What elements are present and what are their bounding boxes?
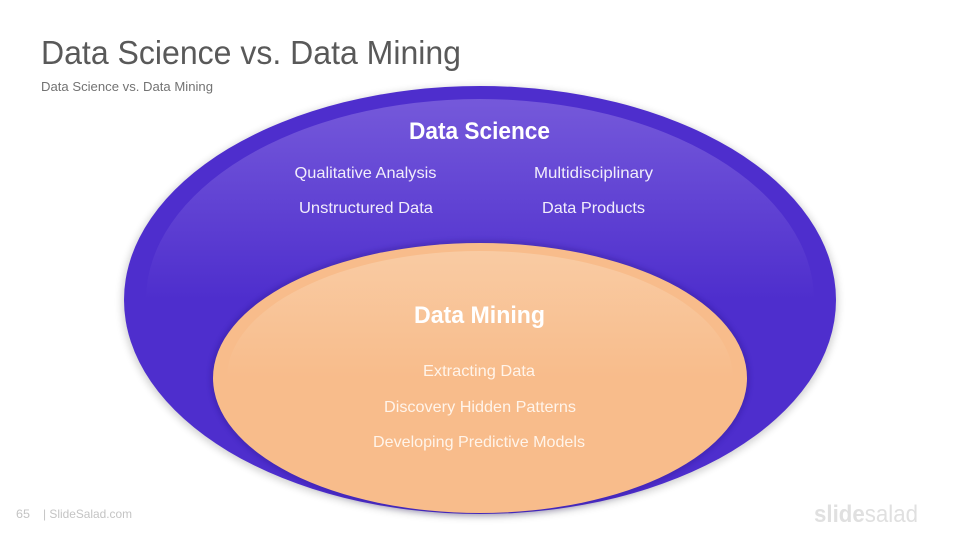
panel: data mining ellipse <box>211 241 749 515</box>
page number: 65 <box>16 507 30 521</box>
subtitle: Data Science vs. Data Mining <box>41 80 213 94</box>
data science items: Unstructured Data <box>299 200 433 217</box>
data mining items <box>373 363 585 451</box>
data science items: Multidisciplinary <box>534 165 653 182</box>
logo wordmark: slidesalad <box>814 501 918 528</box>
data mining items: Discovery Hidden Patterns <box>384 399 576 416</box>
heading: data science: Data Science <box>409 118 550 145</box>
data mining items: Developing Predictive Models <box>373 434 585 451</box>
data science items <box>294 165 653 217</box>
title: Data Science vs. Data Mining <box>41 34 461 71</box>
footer source: | SlideSalad.com <box>43 507 132 521</box>
heading: data mining: Data Mining <box>414 302 545 329</box>
data mining items: Extracting Data <box>423 363 535 380</box>
panel: data science ellipse <box>122 86 838 517</box>
data science items: Qualitative Analysis <box>294 165 436 182</box>
data science items: Data Products <box>542 200 645 217</box>
